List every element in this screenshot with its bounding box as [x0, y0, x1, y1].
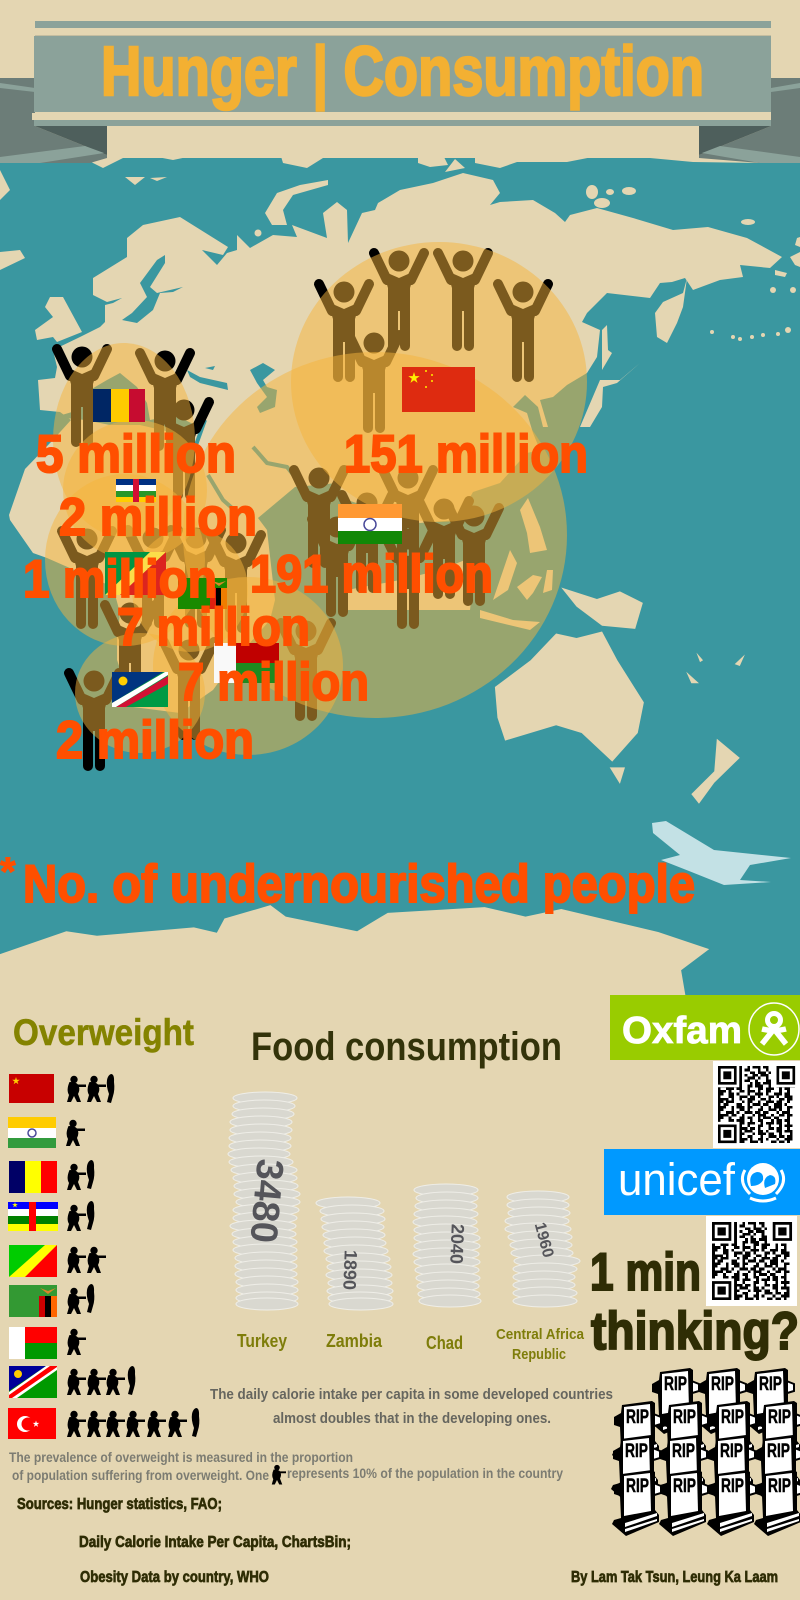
- value: 1960: 1960: [531, 1221, 556, 1260]
- sources: [17, 1496, 351, 1586]
- world map: [0, 0, 800, 1000]
- map flag: Congo: [105, 552, 166, 595]
- RIP tombstones: RIP: [768, 1476, 791, 1497]
- RIP tombstones: [611, 1368, 800, 1536]
- flag row: Congo: [9, 1245, 106, 1277]
- RIP tombstones: RIP: [672, 1441, 695, 1462]
- label: Congo 1 million: 1 million: [23, 550, 217, 609]
- map caption: *: [0, 850, 16, 894]
- plate stack: Zambia: [316, 1197, 393, 1310]
- logo: UNICEF: unicef: [618, 1154, 735, 1205]
- label: China 151 million: 151 million: [344, 425, 588, 484]
- flag row: China: [9, 1074, 114, 1103]
- flag row: Turkey: [8, 1408, 199, 1439]
- RIP tombstones: RIP: [626, 1407, 649, 1428]
- overweight note: represents 10% of the population in the country: [287, 1465, 563, 1481]
- RIP tombstones: RIP: [673, 1476, 696, 1497]
- overweight note: of population suffering from overweight. One: [12, 1467, 269, 1483]
- flag row: India: [8, 1117, 85, 1148]
- map flag: Madagascar: [214, 643, 279, 683]
- sources: Sources: Hunger statistics, FAO;: [17, 1496, 222, 1513]
- map flag: Chad: [93, 389, 145, 422]
- map flag: Namibia: [112, 672, 168, 707]
- RIP tombstones: RIP: [626, 1476, 649, 1497]
- RIP tombstones: RIP: [625, 1441, 648, 1462]
- map caption: No. of undernourished people: [23, 855, 695, 914]
- RIP tombstones: RIP: [721, 1476, 744, 1497]
- bar label: Turkey: Turkey: [237, 1331, 287, 1351]
- RIP tombstones: RIP: [673, 1407, 696, 1428]
- flag row: Zambia: [9, 1284, 94, 1317]
- map flag: India: [338, 504, 402, 544]
- flag row: Namibia: [9, 1366, 135, 1398]
- label: Madagascar 7 million: 7 million: [178, 653, 369, 712]
- flag row: Madagascar: [9, 1327, 86, 1359]
- value: 1890: 1890: [339, 1250, 361, 1290]
- sources: Obesity Data by country, WHO: [80, 1569, 269, 1586]
- food note: [210, 1386, 613, 1427]
- RIP tombstones: RIP: [759, 1374, 782, 1395]
- food note: The daily calorie intake per capita in some developed countries: [210, 1386, 613, 1403]
- map flag: Zambia: [178, 578, 227, 609]
- plate stack: Chad: [413, 1184, 481, 1307]
- logo: Oxfam: Oxfam: [622, 1010, 742, 1052]
- food note: almost doubles that in the developing ones.: [273, 1410, 551, 1427]
- label: Central African Republic 2 million: 2 million: [59, 488, 257, 547]
- logo: Oxfam: [610, 995, 800, 1060]
- RIP tombstones: RIP: [720, 1441, 743, 1462]
- bar label: Chad: Chad: [426, 1333, 463, 1353]
- label: Zambia 7 million: 7 million: [117, 598, 310, 657]
- RIP tombstones: RIP: [711, 1374, 734, 1395]
- RIP tombstones: RIP: [664, 1374, 687, 1395]
- bar label: Central Africa Republic: Republic: [512, 1346, 566, 1363]
- flag row: Central African Republic: [8, 1201, 94, 1231]
- map flag: Central African Republic: [116, 479, 156, 502]
- logo: UNICEF: [604, 1149, 800, 1215]
- bar label: Central Africa Republic: Central Africa: [496, 1326, 585, 1343]
- value: 2040: 2040: [446, 1224, 468, 1264]
- overweight note: The prevalence of overweight is measured in the proportion: [9, 1449, 353, 1465]
- panel: food consumption: [210, 1025, 613, 1427]
- sources: Daily Calorie Intake Per Capita, ChartsBin;: [79, 1534, 351, 1551]
- banner: [32, 21, 771, 126]
- ribbon banner ends: [0, 78, 800, 163]
- overweight note: [9, 1449, 563, 1484]
- heading: food consumption: Food consumption: [251, 1025, 562, 1069]
- translucent population circles: [45, 242, 587, 755]
- RIP tombstones: RIP: [721, 1407, 744, 1428]
- icon: airplane: [652, 821, 791, 885]
- QR code: Oxfam: [713, 1061, 800, 1148]
- value: 3480: 3480: [241, 1157, 291, 1245]
- bar label: Zambia: Zambia: [326, 1331, 383, 1351]
- bar label: Central Africa Republic: [496, 1326, 585, 1363]
- callout: 1 min thinking: [590, 1243, 799, 1361]
- panel: overweight: [8, 1012, 563, 1484]
- plate stack: Turkey: [228, 1092, 300, 1310]
- label: Namibia 2 million: 2 million: [56, 711, 254, 770]
- RIP tombstones: RIP: [767, 1441, 790, 1462]
- heading: overweight: Overweight: [13, 1012, 194, 1053]
- callout: 1 min thinking: 1 min: [590, 1243, 701, 1302]
- QR code: UNICEF: [706, 1216, 797, 1306]
- label: Chad 5 million: 5 million: [36, 425, 236, 484]
- label: India 191 million: 191 million: [250, 545, 493, 604]
- flag row: Chad: [9, 1160, 94, 1193]
- plate stack: Central Africa Republic: [505, 1191, 580, 1307]
- RIP tombstones: RIP: [768, 1407, 791, 1428]
- people figures: [57, 250, 548, 766]
- map flag: China: [402, 367, 475, 412]
